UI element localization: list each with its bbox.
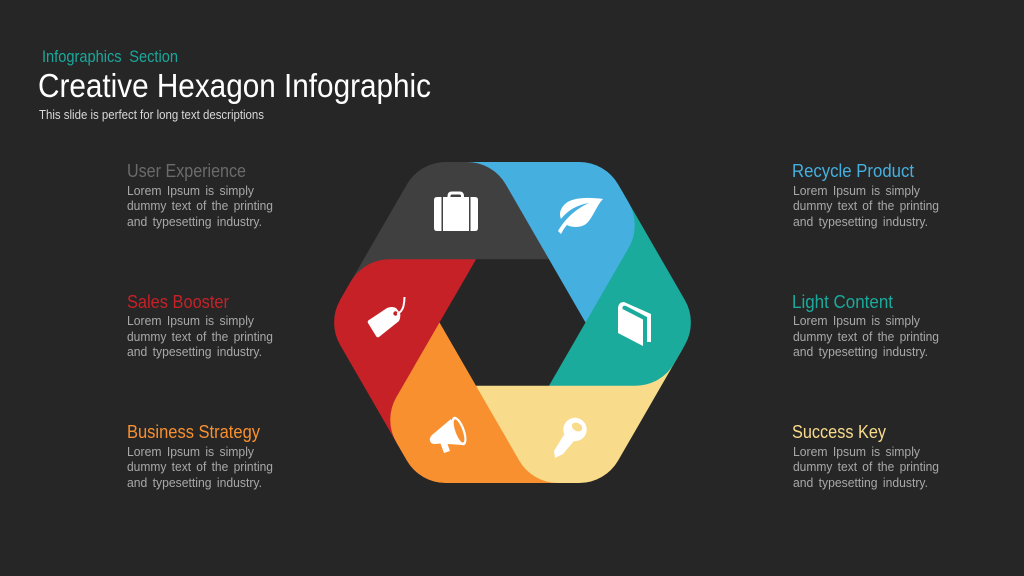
text block: Success Key: dummy text of the printing: [793, 460, 939, 474]
text block: Sales Booster: dummy text of the printing: [127, 330, 273, 344]
text block: Recycle Product: and typesetting industry.: [793, 215, 928, 229]
segment: dark gray: [342, 136, 574, 377]
segment: teal: [481, 188, 713, 428]
text block: Light Content: dummy text of the printing: [793, 330, 939, 344]
segment: red overlap over dark gray: [340, 259, 476, 300]
text block: Recycle Product: Recycle Product: [792, 160, 915, 181]
text block: Recycle Product: Lorem Ipsum is simply: [793, 184, 921, 198]
subtitle: This slide is perfect for long text descriptions: [39, 107, 264, 122]
text block: Business Strategy: Lorem Ipsum is simply: [127, 445, 255, 459]
text block: Recycle Product: dummy text of the printing: [793, 199, 939, 213]
text block: Recycle Product: [792, 160, 939, 229]
text block: Sales Booster: Lorem Ipsum is simply: [127, 314, 255, 328]
hexagon diagram: [334, 162, 691, 483]
segment: orange: [390, 322, 575, 483]
section label: Infographics Section: [42, 48, 178, 66]
text block: Light Content: [792, 291, 939, 359]
text block: Business Strategy: Business Strategy: [127, 421, 261, 442]
text block: Success Key: [792, 421, 939, 490]
text block: Business Strategy: dummy text of the printing: [127, 460, 273, 474]
text block: Light Content: Lorem Ipsum is simply: [793, 314, 921, 328]
text block: Sales Booster: and typesetting industry.: [127, 345, 262, 359]
segment: yellow: [451, 268, 683, 509]
text block: Business Strategy: [127, 421, 273, 490]
title: Creative Hexagon Infographic: [38, 68, 431, 105]
icon: price tag: [368, 297, 404, 337]
text block: Light Content: and typesetting industry.: [793, 345, 928, 359]
text block: User Experience: dummy text of the printing: [127, 199, 273, 213]
text block: Light Content: Light Content: [792, 291, 894, 312]
icon: briefcase: [434, 192, 478, 231]
text block: Success Key: Success Key: [792, 421, 887, 442]
text block: Success Key: and typesetting industry.: [793, 476, 928, 490]
text block: Business Strategy: and typesetting industry.: [127, 476, 262, 490]
icon: key: [554, 418, 587, 458]
text block: User Experience: and typesetting industry.: [127, 215, 262, 229]
text block: User Experience: Lorem Ipsum is simply: [127, 184, 255, 198]
icon: book: [618, 302, 651, 346]
text block: Success Key: Lorem Ipsum is simply: [793, 445, 921, 459]
segment: blue: [450, 162, 635, 322]
icon: leaf: [558, 198, 603, 234]
segment: red: [312, 217, 544, 457]
text block: Sales Booster: [127, 291, 273, 359]
text block: User Experience: User Experience: [127, 160, 246, 181]
icon: megaphone: [430, 415, 470, 453]
text block: User Experience: [127, 160, 273, 229]
text block: Sales Booster: Sales Booster: [127, 291, 229, 312]
